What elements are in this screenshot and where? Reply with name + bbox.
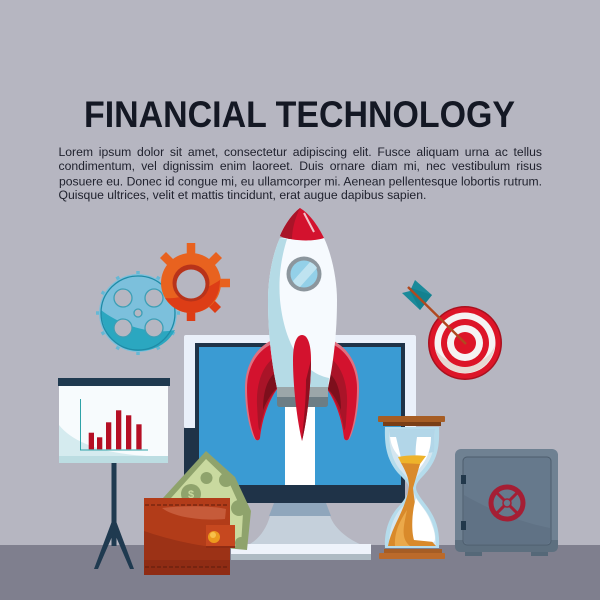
icon: orange gear — [161, 243, 230, 321]
rocket window — [286, 256, 322, 292]
monitor — [184, 335, 416, 560]
body text — [58, 145, 542, 202]
presentation board — [58, 378, 170, 569]
title: FINANCIAL TECHNOLOGY — [84, 93, 515, 135]
body text: Lorem ipsum dolor sit amet, consectetur adipiscing elit. Fusce aliquam urna ac tellus — [58, 145, 542, 159]
wallet clasp — [206, 525, 235, 548]
body text: condimentum, vel dignissim enim laoreet. Duis ornare diam mi, nec vestibulum risus — [58, 159, 542, 173]
body text: Quisque ultrices, velit et mattis tincidunt, erat augue dapibus sapien. — [58, 188, 426, 202]
icon: rocket — [245, 208, 359, 441]
monitor frame — [184, 335, 416, 428]
safe body — [455, 449, 558, 552]
sand — [398, 455, 426, 486]
rocket center fin — [293, 335, 311, 441]
rocket nose — [280, 208, 324, 240]
icon: safe — [455, 449, 558, 556]
arrow — [402, 280, 466, 344]
wallet body — [144, 498, 230, 575]
icon: hourglass — [378, 416, 445, 559]
body text: posuere eu. Donec id congue mi, eu ullamcorper mi. Aenean pellentesque lobortis rutrum. — [58, 174, 542, 188]
rocket body — [268, 238, 337, 388]
bar chart — [80, 399, 148, 450]
cash: $ — [188, 489, 194, 501]
icon: blue gear — [96, 271, 180, 355]
monitor screen — [199, 347, 401, 485]
rocket exhaust beam — [285, 400, 315, 485]
safe hinges — [461, 475, 466, 484]
safe dial — [488, 484, 526, 522]
safe feet — [465, 551, 482, 556]
board screen — [59, 386, 168, 463]
glass — [385, 427, 439, 548]
floor — [0, 545, 600, 600]
rocket nozzle — [277, 387, 328, 397]
icon: wallet with cash — [144, 451, 251, 575]
rocket fins — [245, 340, 359, 440]
icon: target with arrow — [402, 280, 502, 380]
monitor stand — [231, 503, 371, 560]
hourglass caps — [378, 416, 445, 559]
board stand — [94, 463, 134, 569]
